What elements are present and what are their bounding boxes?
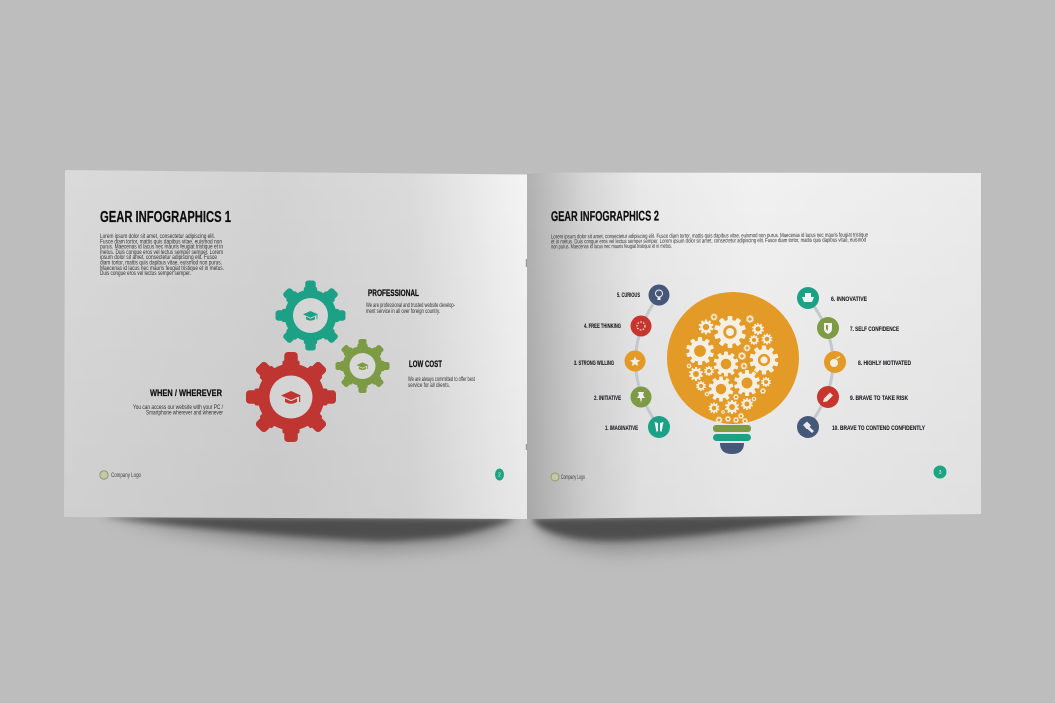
footer: left logo: Company Logo	[111, 473, 141, 479]
text block: left intro: Lorem ipsum dolor sit amet, consectetur adipiscing elit.	[100, 234, 215, 240]
shadow under left page	[100, 516, 517, 541]
text block: left intro	[100, 234, 224, 277]
item 2: initiative	[594, 386, 652, 408]
gutter marks	[526, 259, 527, 450]
text block: left intro: Duis congue eros vel lectus semper semper.	[100, 271, 191, 277]
item 9: brave to take risk	[817, 386, 908, 408]
item 9: brave to take risk: 9. BRAVE TO TAKE RISK	[850, 395, 908, 402]
connector arc: left	[636, 295, 659, 427]
text block: professional: We are professional and trusted website develop-	[366, 303, 455, 309]
text block: low cost: LOW COST	[409, 359, 442, 370]
item 4: free thinking: 4. FREE THINKING	[584, 323, 621, 330]
page number: right: 3	[939, 470, 942, 476]
gear: red when wherever	[246, 352, 336, 442]
connector arc: right	[808, 298, 833, 427]
text block: when wherever: Smartphone wherever and whenever	[146, 410, 223, 416]
item 6: innovative	[797, 287, 867, 309]
text block: left intro: metus. Duis congue eros vel lectus semper semper. Lorem	[100, 250, 223, 256]
text block: when wherever: WHEN / WHEREVER	[150, 388, 222, 399]
item 8: highly motivated: 8. HIGHLY MOTIVATED	[858, 360, 911, 367]
gear: teal professional	[276, 280, 346, 350]
item 10: brave to contend confidently	[797, 416, 926, 438]
text block: professional	[366, 288, 455, 315]
bulb: orange globe with gears	[667, 292, 799, 424]
text block: left intro: Fusce diam tortor, mattis quis dapibus vitae, euismod non	[100, 239, 222, 245]
text block: left intro: diam tortor, mattis quis dapibus vitae, euismod non purus.	[100, 260, 222, 266]
item 6: innovative: 6. INNOVATIVE	[831, 296, 867, 303]
panel: right page	[527, 172, 981, 519]
item 7: self confidence: 7. SELF CONFIDENCE	[850, 326, 899, 333]
item 7: self confidence	[817, 317, 899, 339]
text block: when wherever: You can access our website with your PC /	[133, 405, 223, 411]
text block: right intro	[551, 233, 869, 250]
item 10: brave to contend confidently: 10. BRAVE TO CONTEND CONFIDENTLY	[832, 425, 926, 432]
text block: right intro: et in metus. Duis congue eros vel lectus semper semper. Lorem ipsum dolor sit amet, consectetur adipiscing elit. Fusce diam tortor, mattis quis dapibus vitae, euismod	[551, 238, 866, 245]
title: gear infographics 2: GEAR INFOGRAPHICS 2	[551, 207, 659, 224]
text block: left intro: ipsum dolor sit amet, consectetur adipiscing elit. Fusce	[100, 255, 218, 261]
text block: right intro: non purus. Maecenas id lacus nec mauris feugiat tristique et in metus.	[551, 244, 672, 250]
page number: left: 2	[498, 472, 501, 478]
shadow halo under pages	[110, 514, 870, 552]
item 2: initiative: 2. INITIATIVE	[594, 395, 621, 402]
text block: left intro: purus. Maecenas id lacus nec mauris feugiat tristique et in	[100, 245, 223, 251]
bulb: base	[713, 425, 751, 454]
gear: green low cost	[336, 339, 390, 393]
text block: low cost: We are always committed to offer best	[408, 377, 475, 383]
item 5: curious	[617, 284, 670, 306]
text block: left intro: Maecenas id lacus nec mauris feugiat tristique et in metus.	[100, 266, 224, 272]
panel: left page	[64, 170, 527, 519]
item 1: imaginative: 1. IMAGINATIVE	[605, 425, 638, 432]
shadow under right page	[531, 514, 865, 541]
text block: professional: ment service in all over foreign country.	[366, 309, 440, 315]
item 3: strong willing: 3. STRONG WILLING	[574, 360, 614, 367]
page number: right	[934, 466, 946, 478]
item 1: imaginative	[605, 416, 670, 438]
text block: low cost	[408, 359, 475, 389]
item 3: strong willing	[574, 350, 646, 372]
text block: when wherever	[133, 388, 223, 416]
item 5: curious: 5. CURIOUS	[617, 292, 640, 299]
text block: right intro: Lorem ipsum dolor sit amet, consectetur adipiscing elit. Fusce diam tortor, mattis quis dapibus vitae, euismod non purus. Maecenas id lacus nec mauris feugiat tristique	[551, 233, 868, 240]
footer: right logo	[551, 473, 585, 481]
page number: left	[495, 468, 504, 480]
footer: right logo: Company Logo	[561, 475, 585, 481]
item 8: highly motivated	[824, 351, 911, 373]
footer: left logo	[100, 471, 141, 479]
text block: low cost: service for all clients.	[408, 383, 450, 389]
text block: professional: PROFESSIONAL	[368, 288, 419, 299]
item 4: free thinking	[584, 316, 652, 336]
title: gear infographics 1: GEAR INFOGRAPHICS 1	[100, 209, 231, 226]
